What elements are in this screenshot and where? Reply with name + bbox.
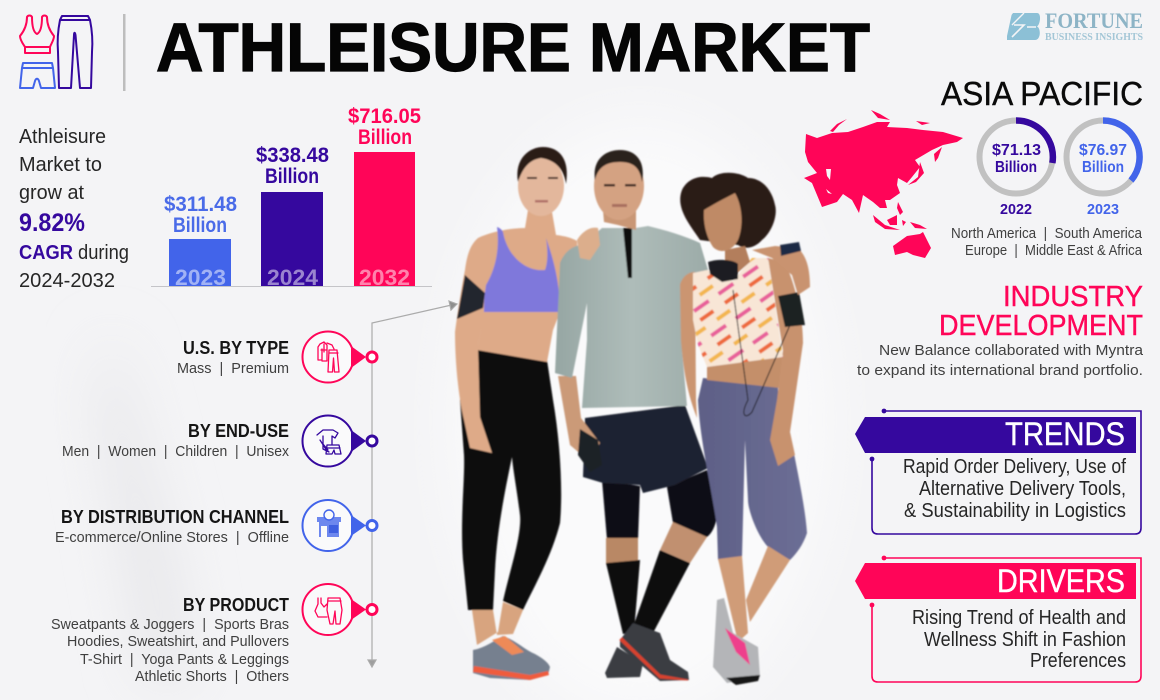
pin icon — [302, 500, 377, 551]
heading: Asia Pacific: ASIA PACIFIC — [941, 75, 1143, 112]
pin icon — [302, 416, 377, 466]
panel: trends — [855, 409, 1141, 534]
banner — [855, 417, 1136, 453]
description: New Balance collaborated with Myntra — [879, 342, 1144, 359]
panel: drivers — [855, 556, 1141, 682]
body text: Alternative Delivery Tools, — [919, 478, 1126, 500]
values: Sweatpants & Joggers | Sports Bras — [51, 616, 289, 633]
label: BY DISTRIBUTION CHANNEL — [61, 507, 289, 527]
bar 2023 — [164, 193, 237, 290]
bar 2032: $716.05 — [348, 105, 421, 128]
bar 2023: Billion — [173, 214, 227, 237]
CAGR text block: 2024-2032 — [19, 270, 115, 292]
woman right: torso — [680, 258, 805, 466]
segment: U.S. by type — [177, 332, 377, 382]
heading — [939, 281, 1143, 342]
body text — [903, 456, 1126, 522]
body text: Wellness Shift in Fashion — [924, 629, 1126, 651]
logo: Fortune Business Insights — [1007, 8, 1143, 43]
label: BY PRODUCT — [183, 595, 289, 615]
segment: by product — [51, 584, 377, 685]
bar 2032: 2032 — [359, 265, 410, 290]
banner — [855, 563, 1136, 599]
bar 2023: $311.48 — [164, 193, 237, 216]
bar 2024: 2024 — [267, 265, 319, 290]
segment: by distribution channel — [55, 500, 377, 551]
arrow: connector timeline — [368, 301, 457, 667]
donut: 2023: $76.97 — [1079, 142, 1127, 159]
man: arm over shoulder — [752, 246, 810, 295]
title: ATHLEISURE MARKET — [156, 9, 870, 86]
heading: DEVELOPMENT — [939, 310, 1143, 342]
donut: 2023 — [1066, 120, 1140, 218]
body text: & Sustainability in Logistics — [904, 500, 1126, 522]
map: Asia Pacific — [804, 110, 963, 258]
CAGR text block: Athleisure — [19, 126, 106, 148]
woman left: head — [517, 147, 567, 216]
description — [857, 342, 1144, 379]
man: head — [594, 150, 644, 230]
icon: leggings — [58, 16, 92, 88]
values: Athletic Shorts | Others — [135, 668, 289, 685]
man: legs and shoes — [602, 470, 717, 681]
regions list: North America | South America — [951, 225, 1143, 242]
logo wordmark: FORTUNE — [1045, 8, 1143, 33]
heading: INDUSTRY — [1003, 281, 1143, 313]
values: Mass | Premium — [177, 360, 289, 377]
donut: 2023: Billion — [1082, 159, 1124, 176]
bar 2024 — [256, 144, 329, 290]
pin icon — [302, 584, 377, 635]
values: Hoodies, Sweatshirt, and Pullovers — [67, 633, 289, 650]
photo: three athletes — [455, 147, 810, 685]
logo mark — [1007, 13, 1040, 40]
icon: shorts — [20, 63, 55, 88]
bar 2023: 2023 — [175, 265, 226, 290]
values — [51, 616, 289, 685]
pin icon — [302, 332, 377, 382]
CAGR text block — [19, 126, 129, 292]
outline — [870, 409, 1141, 534]
CAGR text block: Market to — [19, 154, 102, 176]
woman left: upper body — [455, 210, 578, 453]
icon: sports bra — [20, 16, 54, 53]
bar chart — [151, 105, 432, 290]
values: T-Shirt | Yoga Pants & Leggings — [80, 651, 289, 668]
industry development — [857, 281, 1144, 379]
CAGR text block: grow at — [19, 182, 84, 204]
woman left: leggings and shoes — [460, 348, 561, 680]
donut: 2022: 2022 — [1000, 201, 1032, 218]
banner title: DRIVERS — [997, 563, 1125, 599]
divider — [123, 14, 126, 91]
regions list — [951, 225, 1143, 259]
logo subtitle: BUSINESS INSIGHTS — [1045, 31, 1143, 43]
donut: 2022 — [980, 120, 1053, 218]
axis — [151, 286, 432, 287]
donut: 2023: 2023 — [1087, 201, 1119, 218]
label: U.S. BY TYPE — [183, 338, 289, 358]
description: to expand its international brand portfolio. — [857, 362, 1143, 379]
man: shorts — [583, 405, 708, 493]
label: BY END-USE — [188, 421, 289, 441]
wristwatch — [780, 242, 801, 256]
banner title: TRENDS — [1005, 416, 1125, 452]
bar 2024: $338.48 — [256, 144, 329, 167]
woman right: legs and shoes — [698, 378, 807, 685]
body text: Preferences — [1030, 650, 1126, 672]
body text: Rising Trend of Health and — [912, 607, 1126, 629]
bar 2024: Billion — [265, 165, 319, 188]
man: upper body — [555, 226, 708, 472]
woman right: head — [680, 173, 776, 282]
body text: Rapid Order Delivery, Use of — [903, 456, 1126, 478]
bar 2032 — [348, 105, 421, 290]
outline — [870, 556, 1141, 682]
icon: athleisure clothing set — [20, 16, 92, 88]
bar 2032: Billion — [358, 126, 412, 149]
donut: 2022: Billion — [995, 159, 1037, 176]
segment: by end-use — [62, 416, 377, 466]
CAGR text block: 9.82% — [19, 209, 85, 237]
body text — [912, 607, 1126, 672]
donut: 2022: $71.13 — [992, 142, 1041, 159]
CAGR text block: CAGR during — [19, 242, 129, 264]
values: Men | Women | Children | Unisex — [62, 443, 289, 460]
values: E-commerce/Online Stores | Offline — [55, 529, 289, 546]
